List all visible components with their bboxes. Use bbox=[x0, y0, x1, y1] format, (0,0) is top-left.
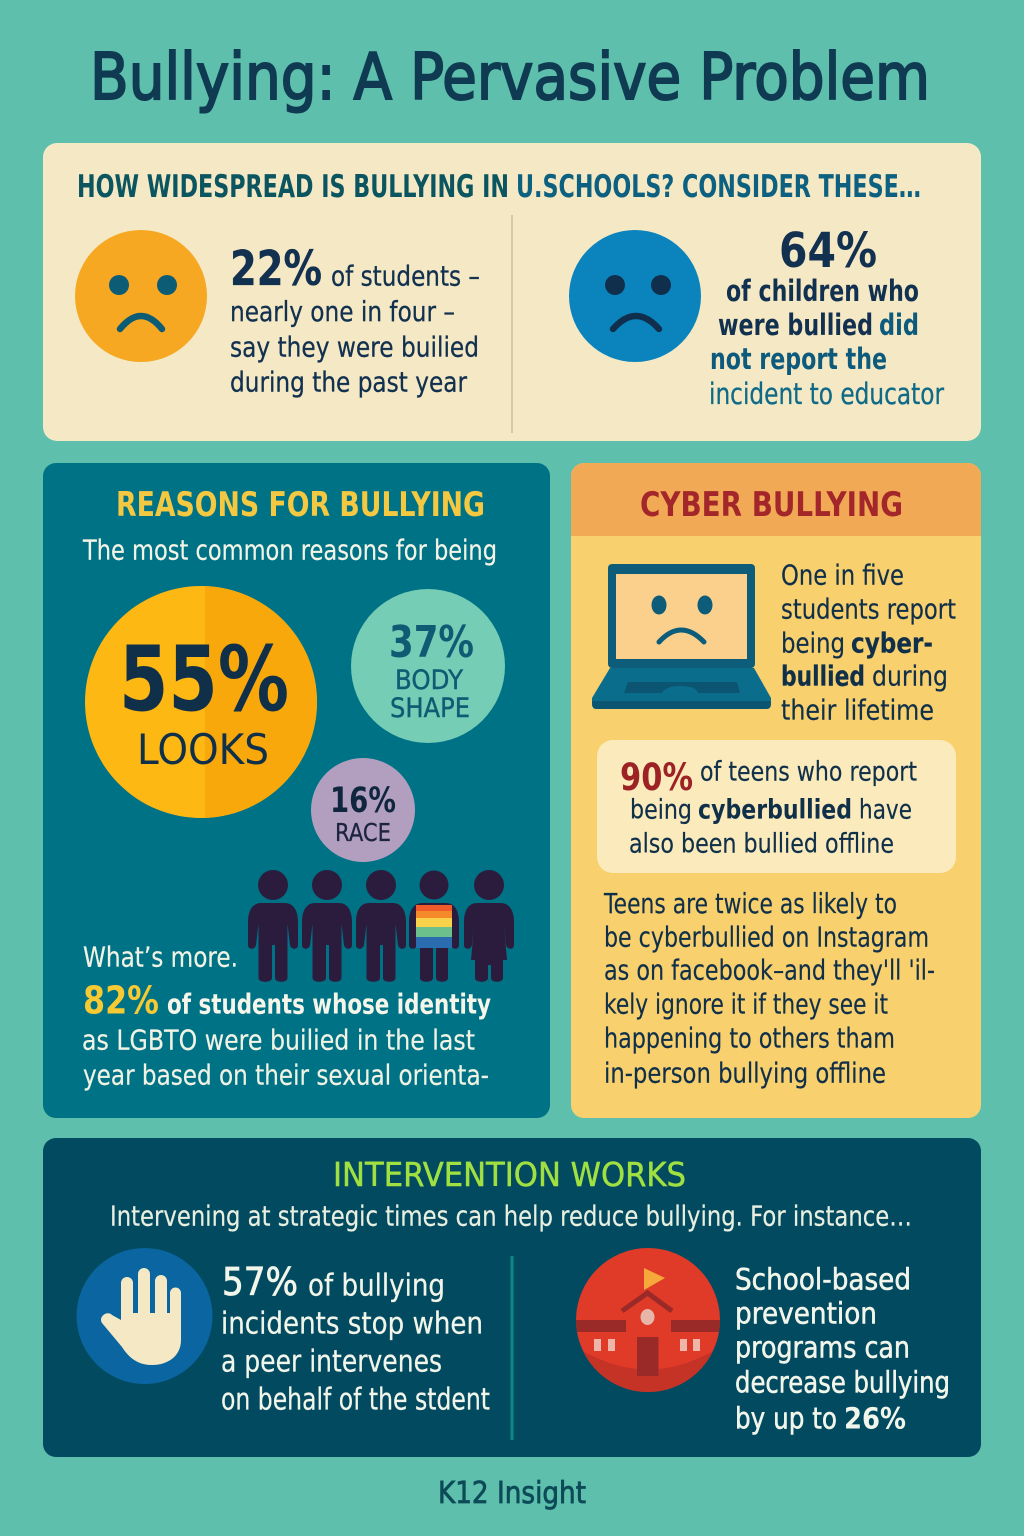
stat circle: 16 percent race: 16% bbox=[330, 781, 396, 821]
text: what's more, 82 percent LGBTQ stat: of students whose identity bbox=[167, 988, 491, 1020]
stat circle: 37 percent body shape bbox=[351, 589, 505, 743]
icon: blue sad face bbox=[569, 230, 701, 362]
panel: reasons for bullying bbox=[43, 463, 550, 1118]
stat circle: 16 percent race bbox=[311, 758, 415, 862]
text: school-based prevention programs: decrease bullying bbox=[735, 1366, 950, 1400]
text: school-based prevention programs: by up to bbox=[735, 1402, 837, 1436]
stat circle: 16 percent race: RACE bbox=[335, 818, 391, 847]
stat circle: 37 percent body shape: SHAPE bbox=[390, 693, 470, 724]
text: what's more, 82 percent LGBTQ stat bbox=[82, 940, 491, 1092]
stat: 64 percent of children: did bbox=[879, 308, 919, 342]
stat circle: 55 percent looks bbox=[85, 586, 317, 818]
stat: 64 percent of children: not report the bbox=[710, 342, 887, 376]
stat: 64 percent of children: incident to educator bbox=[709, 377, 944, 411]
stat: 57 percent of incidents bbox=[221, 1260, 490, 1418]
panel heading: intervention works: INTERVENTION WORKS bbox=[333, 1155, 686, 1194]
text: school-based prevention programs: prevention bbox=[735, 1296, 877, 1330]
text: one in five students: One in five bbox=[781, 558, 904, 592]
stat: 22 percent of students: 22% bbox=[230, 241, 322, 297]
footer: K12 Insight: K12 Insight bbox=[438, 1476, 586, 1511]
panel heading: how widespread: HOW WIDESPREAD IS BULLYING IN bbox=[77, 169, 509, 205]
stat: 57 percent of incidents: on behalf of the stdent bbox=[221, 1382, 490, 1418]
text: what's more, 82 percent LGBTQ stat: What’s more. bbox=[83, 940, 238, 974]
stat: 64 percent of children: of children who bbox=[726, 274, 919, 308]
stat circle: 55 percent looks: 55% bbox=[119, 627, 289, 732]
text: school-based prevention programs: 26% bbox=[844, 1402, 906, 1436]
stat: 22 percent of students: during the past year bbox=[230, 366, 467, 398]
text: instagram paragraph: be cyberbullied on Instagram bbox=[604, 920, 929, 954]
icon: orange sad face bbox=[75, 230, 207, 362]
stat circle: 37 percent body shape: BODY bbox=[395, 665, 463, 696]
panel: cyber bullying bbox=[571, 463, 981, 1118]
stat: 64 percent of children bbox=[709, 223, 944, 411]
icon: raised hand bbox=[76, 1248, 212, 1384]
text: instagram paragraph: kely ignore it if they see it bbox=[604, 988, 888, 1020]
callout: 90 percent of teens: being bbox=[630, 794, 692, 826]
panel heading: cyber bullying: CYBER BULLYING bbox=[640, 485, 903, 525]
title: Bullying: A Pervasive Problem bbox=[90, 41, 930, 115]
panel heading: reasons for bullying: REASONS FOR BULLYING bbox=[116, 485, 485, 525]
callout: 90 percent of teens: cyberbullied bbox=[698, 794, 852, 826]
icon: rainbow shirt bbox=[416, 905, 452, 948]
text: what's more, 82 percent LGBTQ stat: as LGBTO were builied in the last bbox=[82, 1024, 475, 1056]
panel: intervention works bbox=[43, 1138, 981, 1457]
panel: how widespread bbox=[43, 143, 981, 441]
icon: school building bbox=[576, 1248, 720, 1392]
callout: 90 percent of teens: have bbox=[859, 794, 912, 826]
text: one in five students: bullied bbox=[781, 660, 865, 692]
callout: 90 percent of teens: also been bullied offline bbox=[629, 828, 894, 860]
stat: 57 percent of incidents: incidents stop when bbox=[221, 1306, 483, 1342]
text: instagram paragraph: in-person bullying offline bbox=[604, 1056, 886, 1090]
stat: 22 percent of students: say they were builied bbox=[230, 330, 479, 364]
stat: 64 percent of children: were bullied bbox=[718, 308, 873, 342]
text: instagram paragraph: as on facebook–and they'll 'il- bbox=[604, 954, 935, 986]
text: one in five students: students report bbox=[781, 592, 956, 626]
text: school-based prevention programs: programs can bbox=[735, 1330, 910, 1364]
stat: 57 percent of incidents: a peer intervenes bbox=[221, 1344, 442, 1380]
text: one in five students: cyber- bbox=[851, 626, 933, 660]
stat: 22 percent of students bbox=[230, 241, 480, 398]
text: instagram paragraph: Teens are twice as likely to bbox=[603, 887, 897, 920]
text: one in five students: during bbox=[872, 660, 948, 692]
callout: 90 percent of teens: of teens who report bbox=[700, 756, 917, 788]
stat: 22 percent of students: nearly one in four – bbox=[230, 295, 455, 328]
stat: 22 percent of students: of students – bbox=[331, 260, 480, 292]
text: what's more, 82 percent LGBTQ stat: year based on their sexual orienta- bbox=[83, 1058, 489, 1092]
callout: 90 percent of teens bbox=[597, 740, 956, 873]
intro text: The most common reasons for being bbox=[82, 534, 497, 566]
stat circle: 55 percent looks: LOOKS bbox=[137, 725, 269, 774]
text: school-based prevention programs bbox=[735, 1262, 950, 1436]
icon: sad laptop bbox=[592, 564, 771, 709]
text: instagram paragraph bbox=[603, 887, 935, 1090]
text: one in five students bbox=[781, 558, 956, 726]
stat circle: 37 percent body shape: 37% bbox=[389, 617, 474, 668]
stat: 57 percent of incidents: 57% bbox=[222, 1260, 298, 1304]
text: one in five students: being bbox=[781, 626, 845, 660]
text: one in five students: their lifetime bbox=[781, 694, 934, 726]
icon: row of five people bbox=[248, 870, 514, 982]
stat: 57 percent of incidents: of bullying bbox=[308, 1268, 445, 1304]
stat: 64 percent of children: 64% bbox=[779, 223, 877, 279]
callout: 90 percent of teens: 90% bbox=[620, 756, 693, 799]
text: what's more, 82 percent LGBTQ stat: 82% bbox=[83, 978, 159, 1022]
text: instagram paragraph: happening to others tham bbox=[604, 1022, 895, 1054]
text: school-based prevention programs: School-based bbox=[735, 1262, 911, 1296]
